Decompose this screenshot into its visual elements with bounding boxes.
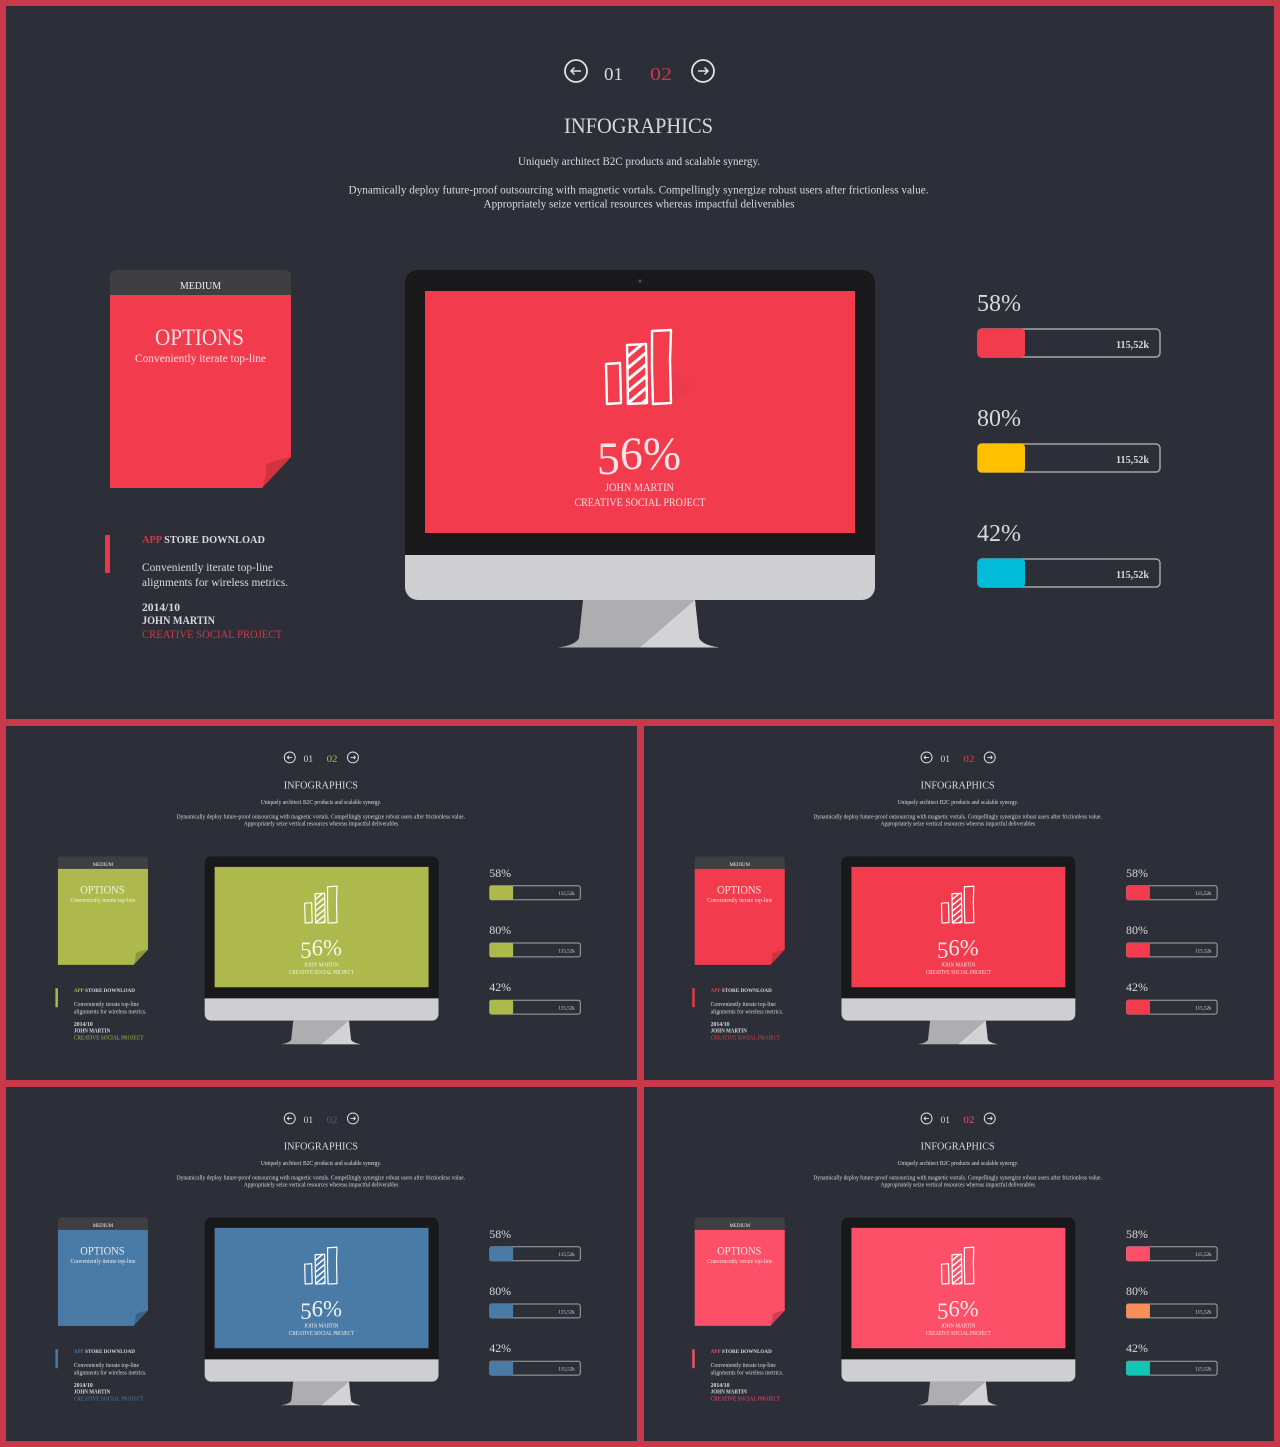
panel: green variant: 6% [312,935,342,961]
panel: red variant: 01 [940,754,950,764]
panel: pink variant: 115,52k [1195,1367,1212,1373]
intro text [348,154,928,210]
panel: green variant: JOHN MARTIN [74,1029,111,1035]
panel: red variant: 02 [963,754,974,764]
panel: pink variant: Dynamically deploy future-proof outsourcing with magnetic vortals. Compellingly synergize robust users after frictionless value. [813,1175,1102,1182]
panel: blue variant: 6% [312,1296,342,1322]
app store text block: CREATIVE SOCIAL PROJECT [142,629,282,641]
panel: green variant: 115,52k [558,1006,575,1012]
panel: pink variant: INFOGRAPHICS [921,1140,995,1152]
screen caption [574,482,706,509]
icon: hand-drawn bar chart [606,330,700,405]
panel: blue variant: INFOGRAPHICS [284,1140,358,1152]
panel: blue variant: JOHN MARTIN [74,1390,111,1396]
monitor [405,270,875,648]
progress bar 42%: 115,52k [1116,569,1150,581]
screen caption: CREATIVE SOCIAL PROJECT [574,497,706,509]
panel: blue variant: MEDIUM [93,1223,113,1229]
panel: pink variant: JOHN MARTIN [711,1390,748,1396]
panel: pink variant: 5 [937,1299,948,1325]
app store text block: 2014/10 [142,602,180,614]
panel: red variant: APP STORE DOWNLOAD [711,988,772,994]
progress bar 80% [977,406,1160,472]
panel: red variant: JOHN MARTIN [941,962,975,968]
panel: red variant: 115,52k [1195,948,1212,954]
panel: green variant: 02 [327,754,338,764]
panel: pink variant: 115,52k [1195,1309,1212,1315]
progress bar 80%: 115,52k [1116,454,1150,466]
intro text: Dynamically deploy future-proof outsourcing with magnetic vortals. Compellingly synergize robust users after frictionless value. [348,182,928,196]
panel: blue variant: Conveniently iterate top-line [74,1363,139,1369]
panel: blue variant: OPTIONS [80,1246,125,1258]
app store text block [142,534,288,641]
sticky note card: Conveniently iterate top-line [135,351,266,365]
panel: red variant: Uniquely architect B2C products and scalable synergy. [898,800,1019,806]
panel: pink variant: 42% [1126,1341,1148,1355]
progress bar 58%: 58% [977,291,1021,317]
app store text block: Conveniently iterate top-line [142,560,273,574]
panel: pink variant: 58% [1126,1227,1148,1241]
panel: blue variant: 115,52k [558,1367,575,1373]
panel: green variant [6,726,637,1080]
sticky note card [110,270,291,488]
panel: red variant: INFOGRAPHICS [921,779,995,791]
panel: green variant: JOHN MARTIN [304,962,339,968]
panel: pink variant: 115,52k [1195,1252,1212,1258]
panel: green variant: 80% [489,923,511,937]
title: INFOGRAPHICS [564,113,713,138]
panel: pink variant: Appropriately seize vertical resources whereas impactful deliverables [881,1182,1036,1189]
panel: blue variant: 5 [300,1299,312,1325]
panel: red variant: 42% [1126,980,1148,994]
panel: red variant: 58% [1126,866,1148,880]
panel: blue variant: alignments for wireless metrics. [74,1370,147,1377]
panel: blue variant: JOHN MARTIN [304,1323,339,1329]
panel: red variant: Appropriately seize vertical resources whereas impactful deliverables [881,821,1036,828]
screen caption: JOHN MARTIN [605,482,675,494]
sticky note card: OPTIONS [155,325,244,350]
panel: blue variant: CREATIVE SOCIAL PROJECT [74,1397,144,1403]
panel: blue variant: Conveniently iterate top-line [70,1259,136,1265]
panel: green variant: Conveniently iterate top-line [74,1002,139,1008]
panel: red variant: CREATIVE SOCIAL PROJECT [711,1036,781,1042]
panel: green variant: 2014/10 [74,1022,93,1028]
panel: blue variant: 42% [489,1341,511,1355]
app store text block: APP STORE DOWNLOAD [142,534,265,546]
intro text: Appropriately seize vertical resources whereas impactful deliverables [484,196,795,210]
navigation: pager: 02 [650,64,672,84]
panel: pink variant: 80% [1126,1284,1148,1298]
panel: pink variant: 02 [963,1115,974,1125]
panel: blue variant [6,1087,637,1441]
progress bar 42%: 42% [977,521,1021,547]
progress bar 42% [977,521,1160,588]
panel: red variant: 5 [937,938,948,964]
panel: blue variant: Appropriately seize vertical resources whereas impactful deliverables [244,1182,399,1189]
panel: blue variant: 01 [304,1115,313,1125]
panel: red variant: 115,52k [1195,891,1212,897]
panel: pink variant: JOHN MARTIN [941,1323,975,1329]
panel: green variant: 01 [304,754,313,764]
panel: pink variant: Uniquely architect B2C products and scalable synergy. [898,1161,1019,1167]
panel: red variant: CREATIVE SOCIAL PROJECT [926,970,991,976]
panel: green variant: OPTIONS [80,885,125,897]
app store text block: alignments for wireless metrics. [142,575,288,589]
panel: pink variant: 01 [940,1115,950,1125]
progress bar 80%: 80% [977,406,1021,432]
panel: red variant: 2014/10 [711,1022,730,1028]
panel: pink variant: Conveniently iterate top-line [711,1363,776,1369]
panel: green variant: alignments for wireless metrics. [74,1009,147,1016]
panel: blue variant: 58% [489,1227,511,1241]
panel: green variant: Appropriately seize vertical resources whereas impactful deliverables [244,821,399,828]
panel: main infographic slide [6,6,1274,719]
progress bar 58% [977,291,1160,358]
panel: green variant: CREATIVE SOCIAL PROJECT [74,1036,144,1042]
panel: green variant: MEDIUM [93,862,113,868]
panel: blue variant: 115,52k [558,1309,575,1315]
panel: red variant: alignments for wireless metrics. [711,1009,784,1016]
panel: blue variant: 115,52k [558,1252,575,1258]
panel: red variant: Conveniently iterate top-line [711,1002,776,1008]
panel: pink variant: 2014/10 [711,1383,730,1389]
panel: green variant: Dynamically deploy future-proof outsourcing with magnetic vortals. Compellingly synergize robust users after frictionless value. [177,814,466,821]
panel: green variant: CREATIVE SOCIAL PROJECT [289,970,355,976]
panel: green variant: INFOGRAPHICS [284,779,358,791]
big percentage: 6% [620,428,681,480]
panel: green variant: 5 [300,938,312,964]
panel: blue variant: 80% [489,1284,511,1298]
panel: red variant: MEDIUM [730,862,750,868]
panel: pink variant: MEDIUM [730,1223,750,1229]
panel: green variant: Uniquely architect B2C products and scalable synergy. [261,800,382,806]
panel: red variant: 115,52k [1195,1006,1212,1012]
panel: pink variant: CREATIVE SOCIAL PROJECT [926,1331,991,1337]
panel: red variant: Conveniently iterate top-line [707,898,773,904]
panel: blue variant: 2014/10 [74,1383,93,1389]
panel: blue variant: Dynamically deploy future-proof outsourcing with magnetic vortals. Compellingly synergize robust users after frictionless value. [177,1175,466,1182]
sticky note card: MEDIUM [180,280,221,292]
panel: blue variant: APP STORE DOWNLOAD [74,1349,135,1355]
panel: red variant: 6% [948,935,979,961]
panel: blue variant: 02 [327,1115,338,1125]
navigation: pager [565,60,714,84]
panel: pink variant [644,1087,1274,1441]
accent bar [105,535,110,573]
panel: pink variant: 6% [948,1296,979,1322]
panel: red variant: 80% [1126,923,1148,937]
panel: pink variant: OPTIONS [717,1246,761,1258]
panel: red variant [644,726,1274,1080]
panel: blue variant: Uniquely architect B2C products and scalable synergy. [261,1161,382,1167]
panel: red variant: JOHN MARTIN [711,1029,748,1035]
panel: green variant: Conveniently iterate top-line [70,898,136,904]
panel: pink variant: CREATIVE SOCIAL PROJECT [711,1397,781,1403]
panel: green variant: 42% [489,980,511,994]
panel: green variant: 115,52k [558,948,575,954]
big percentage: 5 [597,433,620,485]
app store text block: JOHN MARTIN [142,615,216,627]
panel: green variant: 58% [489,866,511,880]
panel: red variant: Dynamically deploy future-proof outsourcing with magnetic vortals. Compellingly synergize robust users after frictionless value. [813,814,1102,821]
panel: pink variant: APP STORE DOWNLOAD [711,1349,772,1355]
panel: pink variant: Conveniently iterate top-line [707,1259,773,1265]
panel: pink variant: alignments for wireless metrics. [711,1370,784,1377]
panel: green variant: 115,52k [558,891,575,897]
progress bar 58%: 115,52k [1116,339,1150,351]
navigation: pager: 01 [604,64,623,84]
panel: blue variant: CREATIVE SOCIAL PROJECT [289,1331,355,1337]
panel: red variant: OPTIONS [717,885,761,897]
panel: green variant: APP STORE DOWNLOAD [74,988,135,994]
intro text: Uniquely architect B2C products and scalable synergy. [518,154,760,168]
